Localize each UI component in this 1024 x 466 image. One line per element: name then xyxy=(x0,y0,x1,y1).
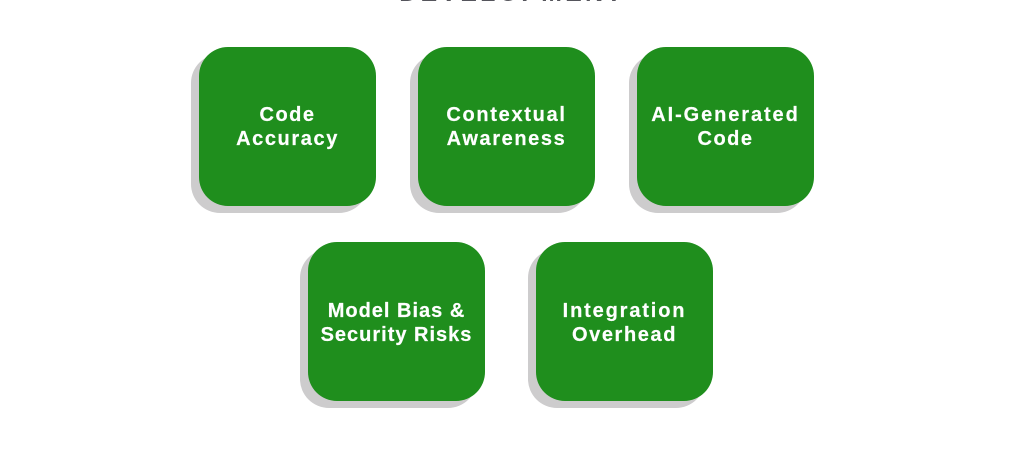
card: Code Accuracy: Code xyxy=(260,104,316,126)
card: Integration Overhead: Integration xyxy=(563,300,686,322)
card: Model Bias & Security Risks: Security Risks xyxy=(321,324,472,346)
card: Contextual Awareness xyxy=(410,47,595,213)
card: Contextual Awareness: Awareness xyxy=(447,128,566,150)
card: AI-Generated Code: AI-Generated xyxy=(651,104,800,126)
card: Model Bias & Security Risks xyxy=(300,242,485,408)
card: AI-Generated Code: Code xyxy=(698,128,754,150)
card: Model Bias & Security Risks: Model Bias & xyxy=(328,300,465,322)
card: Integration Overhead: Overhead xyxy=(572,324,677,346)
card: Code Accuracy xyxy=(191,47,376,213)
card: AI-Generated Code xyxy=(629,47,814,213)
card: Integration Overhead xyxy=(528,242,713,408)
card: Contextual Awareness: Contextual xyxy=(446,104,567,126)
card: Code Accuracy: Accuracy xyxy=(236,128,339,150)
